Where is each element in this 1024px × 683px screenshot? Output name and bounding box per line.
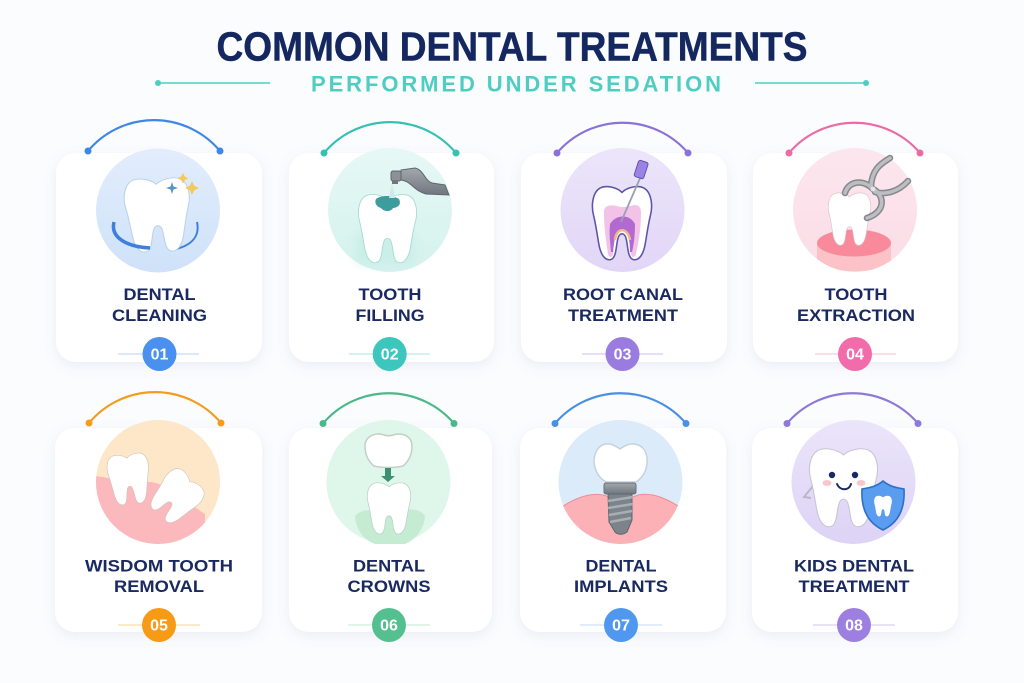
icon: impacted wisdom teeth	[96, 420, 220, 544]
number badge	[349, 337, 430, 371]
number badge: 01	[151, 347, 168, 364]
label: REMOVAL	[114, 578, 204, 596]
label	[563, 286, 683, 325]
title: COMMON DENTAL TREATMENTS	[216, 24, 808, 70]
panel: tooth extraction	[753, 123, 958, 371]
label: TOOTH	[824, 286, 888, 304]
number badge: 05	[150, 618, 168, 635]
arc accent	[554, 123, 692, 156]
label: TOOTH	[358, 286, 422, 304]
number badge: 06	[380, 618, 398, 635]
icon: root canal tooth	[560, 148, 684, 272]
label: CROWNS	[348, 578, 430, 596]
arc accent	[320, 393, 458, 427]
label: WISDOM TOOTH	[85, 558, 233, 576]
number badge: 08	[845, 618, 863, 635]
label: FILLING	[356, 307, 424, 325]
icon: crown over tooth	[326, 420, 450, 544]
number badge	[582, 337, 663, 371]
label	[794, 558, 914, 596]
icon: tooth and forceps	[793, 148, 917, 272]
number badge	[815, 337, 896, 371]
label: CLEANING	[112, 307, 207, 325]
label	[574, 558, 668, 596]
panel: root canal treatment	[521, 123, 727, 371]
left subtitle ornament	[155, 80, 270, 86]
arc accent	[552, 393, 690, 427]
right subtitle ornament	[755, 80, 869, 86]
icon: implant	[558, 420, 682, 544]
arc accent	[786, 123, 924, 156]
arc accent	[86, 392, 224, 426]
panel: dental crowns	[289, 393, 492, 642]
panel: kids dental treatment	[752, 393, 958, 642]
panel: dental cleaning	[56, 120, 262, 371]
label	[85, 558, 233, 596]
label: IMPLANTS	[574, 578, 668, 596]
label: DENTAL	[124, 286, 196, 304]
label: DENTAL	[353, 558, 425, 576]
number badge: 02	[381, 347, 399, 364]
label: ROOT CANAL	[563, 286, 683, 304]
arc accent	[84, 120, 224, 154]
forceps	[845, 158, 908, 218]
number badge	[348, 608, 430, 642]
label: EXTRACTION	[797, 307, 915, 325]
number badge	[118, 608, 200, 642]
arc accent	[784, 393, 922, 427]
panel: dental implants	[520, 393, 726, 642]
number badge	[580, 608, 662, 642]
subtitle: PERFORMED UNDER SEDATION	[311, 72, 721, 96]
icon: sparkling tooth	[96, 148, 220, 272]
label: DENTAL	[586, 558, 656, 576]
number badge	[813, 608, 895, 642]
label: KIDS DENTAL	[794, 558, 914, 576]
label	[348, 558, 430, 596]
panel: wisdom tooth removal	[55, 392, 262, 642]
number badge: 07	[612, 618, 630, 635]
icon: tooth and drill	[328, 148, 452, 272]
label	[356, 286, 424, 325]
number badge: 04	[846, 347, 864, 364]
arc accent	[320, 122, 460, 156]
panel: tooth filling	[289, 122, 494, 371]
number badge: 03	[614, 347, 632, 364]
label: TREATMENT	[798, 578, 910, 596]
icon: smiling tooth with shield	[792, 420, 916, 544]
label	[112, 286, 207, 325]
label	[797, 286, 915, 325]
label: TREATMENT	[568, 307, 678, 325]
number badge	[118, 337, 199, 371]
